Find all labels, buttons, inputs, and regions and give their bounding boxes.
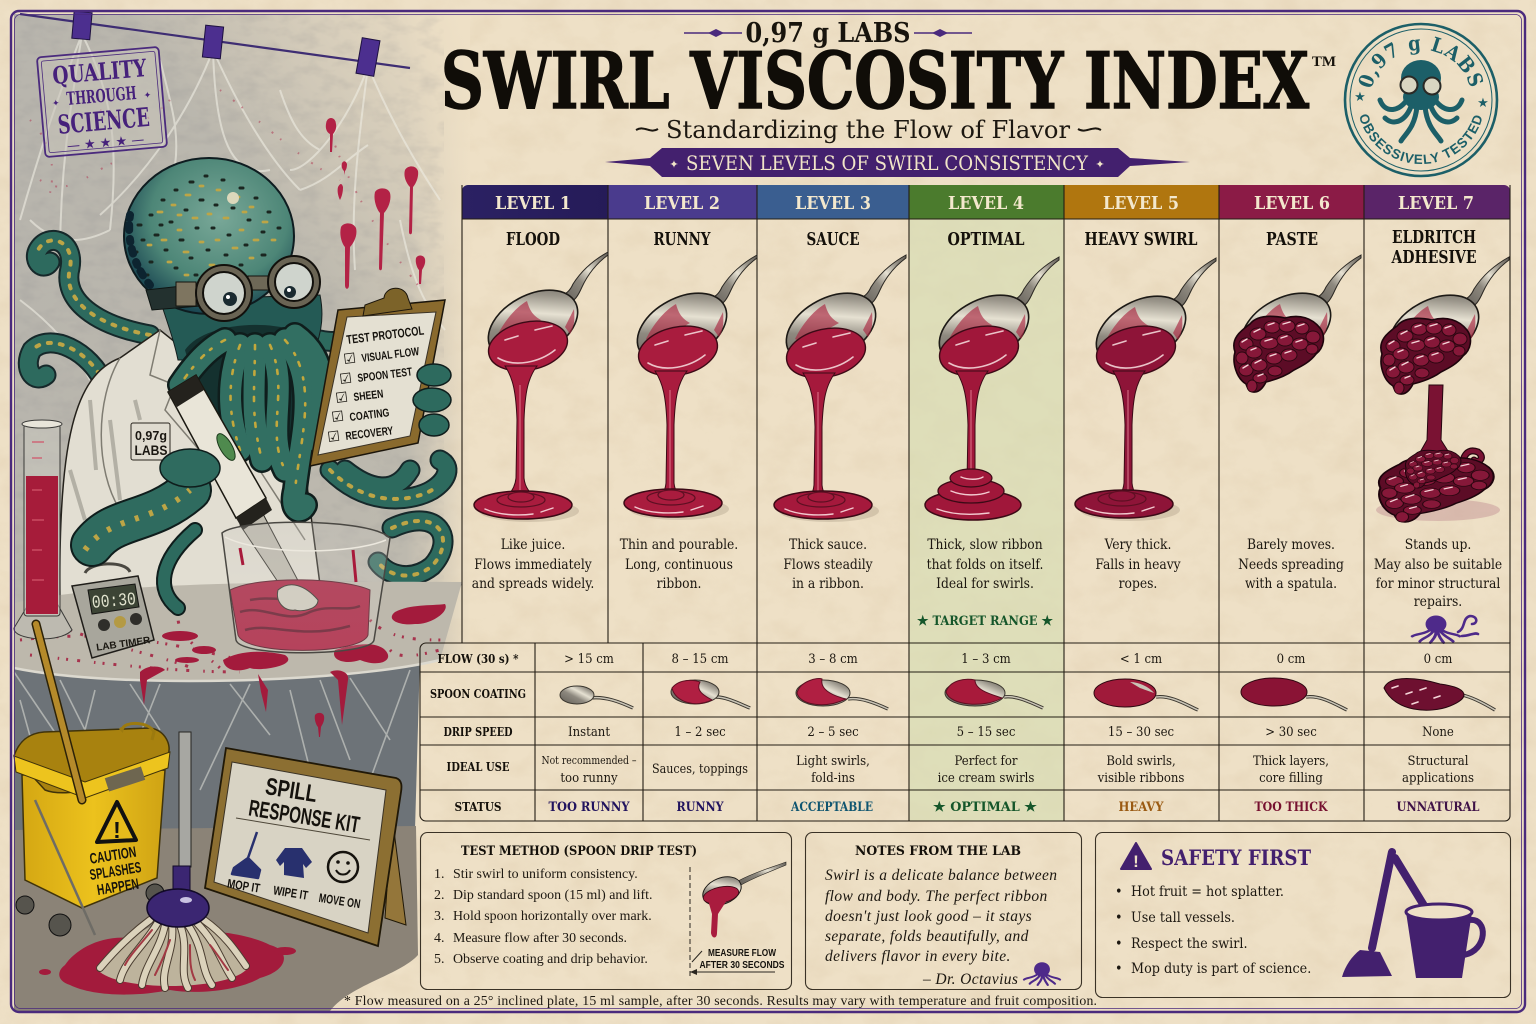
back tentacles [28, 240, 447, 576]
yellow bucket with caution sign: SPLASHES [88, 859, 142, 884]
level 4 column [917, 230, 1059, 629]
plastic sheeting backdrop [14, 14, 470, 654]
level 7 column: for minor structural [1376, 576, 1500, 592]
level 2 column: ribbon. [657, 576, 701, 592]
stamp: 0,97 g labs: 0,97 g LABS [1358, 36, 1484, 87]
panel: safety first: SAFETY FIRST [1161, 845, 1311, 870]
row: status: UNNATURAL [1396, 800, 1480, 815]
clipboard: test protocol: COATING [349, 407, 390, 424]
level header bands: LEVEL 5 [1103, 193, 1179, 214]
row: ideal use: ice cream swirls [938, 771, 1034, 786]
row labels: SPOON COATING [430, 686, 526, 701]
row: ideal use: applications [1402, 771, 1474, 786]
steps list: 2. [434, 888, 444, 903]
sign: quality through science: ✦ [52, 99, 61, 109]
row: status [548, 800, 1480, 815]
safety list [1115, 884, 1311, 977]
level header bands: LEVEL 3 [795, 193, 871, 214]
level header bands: LEVEL 7 [1398, 193, 1474, 214]
row: ideal use: Sauces, toppings [652, 762, 748, 777]
row labels: IDEAL USE [446, 759, 510, 774]
level 7 column: May also be suitable [1374, 557, 1502, 573]
level 6 column: Needs spreading [1238, 557, 1344, 573]
sign: spill response kit: MOP IT [226, 877, 261, 896]
banner: SEVEN LEVELS OF SWIRL CONSISTENCY [686, 152, 1088, 175]
icon: warning triangle: ! [1133, 852, 1139, 871]
level 3 column: Thick sauce. [789, 537, 867, 553]
lab timer: 00:30 [91, 590, 137, 614]
panel: notes from the lab: delivers flavor in every bite. [825, 948, 1011, 965]
row labels: DRIP SPEED [444, 724, 513, 739]
table grid [420, 643, 1510, 821]
table [14, 582, 462, 830]
level 2 column: Long, continuous [625, 557, 733, 573]
row: status: TOO THICK [1254, 800, 1328, 815]
subtitle: Standardizing the Flow of Flavor [666, 116, 1071, 144]
footnote: * Flow measured on a 25° inclined plate, 15 ml sample, after 30 seconds. Results may vary with temperature and fruit composition. [344, 993, 1097, 1008]
row: status: TOO RUNNY [548, 800, 630, 815]
level 6 column: PASTE [1266, 230, 1318, 250]
row: status: ★ OPTIMAL ★ [933, 800, 1037, 815]
beaker with swirl [222, 522, 390, 653]
steps list: 4. [434, 931, 444, 946]
sign: spill response kit [205, 748, 406, 946]
brand line: 0,97 g LABS [746, 18, 910, 49]
panel: notes from the lab: separate, folds beautifully, and [825, 928, 1029, 945]
brand line [684, 18, 972, 49]
sign: quality through science [37, 47, 167, 157]
steps list: Observe coating and drip behavior. [453, 952, 648, 967]
row: drip speed [568, 725, 1454, 740]
row: drip speed: 1 – 2 sec [674, 725, 726, 740]
face tentacles [180, 325, 325, 510]
level 6 column: Barely moves. [1247, 537, 1335, 553]
icon: spoon drip diagram [690, 862, 786, 977]
row: flow [564, 652, 1452, 667]
safety list: • [1115, 936, 1123, 952]
row labels: STATUS [454, 799, 502, 814]
row: drip speed: 15 – 30 sec [1108, 725, 1175, 740]
sign: spill response kit: SPILL [263, 773, 319, 808]
illustration: lab scene [14, 11, 470, 1011]
row: ideal use: too runny [560, 771, 618, 786]
stamp: 0,97 g labs: ★ [1354, 90, 1366, 105]
clothesline and clips [20, 11, 410, 76]
row: flow: 8 – 15 cm [672, 652, 728, 667]
lab coat with badge: 0,97g [135, 428, 167, 443]
icon: warning triangle [1121, 843, 1151, 871]
level 5 column: HEAVY SWIRL [1084, 230, 1198, 250]
level 1 column: Like juice. [501, 537, 565, 553]
stamp: 0,97 g labs [1344, 22, 1498, 178]
row labels: FLOW (30 s) * [438, 651, 519, 666]
clipboard: test protocol: RECOVERY [345, 425, 394, 443]
level 1 column: and spreads widely. [472, 576, 594, 592]
sign: quality through science: QUALITY [51, 53, 148, 90]
stamp: 0,97 g labs: ★ [1477, 96, 1489, 111]
sign: quality through science: ✦ [143, 91, 152, 101]
row: drip speed: None [1422, 725, 1454, 740]
level 3 column: SAUCE [806, 230, 860, 250]
level 4 column: Thick, slow ribbon [927, 537, 1043, 553]
steps list: 5. [434, 952, 444, 967]
column rules [462, 185, 1510, 643]
row: spoon coating [560, 678, 1495, 710]
hand with blender [85, 375, 304, 608]
level header bands: LEVEL 2 [644, 193, 720, 214]
floor spill [39, 931, 296, 995]
row: flow: < 1 cm [1120, 652, 1162, 667]
goggles [146, 256, 320, 321]
level 7 column: Stands up. [1405, 537, 1471, 553]
row: ideal use: core filling [1259, 771, 1323, 786]
clipboard: test protocol: ☑ [339, 371, 353, 388]
icon: spoon drip diagram: AFTER 30 SECONDS [700, 960, 785, 971]
panel: notes from the lab: Swirl is a delicate balance between [825, 867, 1057, 884]
cylinder with red liquid [14, 420, 72, 639]
panel: notes from the lab [806, 832, 1082, 990]
lab coat with badge [60, 330, 322, 600]
panel: test method: TEST METHOD (SPOON DRIP TEST) [461, 844, 697, 859]
steps list: 1. [434, 867, 444, 882]
lab coat with badge: LABS [134, 443, 168, 458]
clipboard: test protocol: SHEEN [353, 388, 384, 404]
row: ideal use: Not recommended – [542, 754, 637, 767]
safety list: • [1115, 884, 1123, 900]
level 4 column: OPTIMAL [948, 230, 1024, 250]
panel: notes from the lab: NOTES FROM THE LAB [855, 843, 1021, 859]
row: ideal use: Bold swirls, [1106, 754, 1176, 769]
yellow bucket with caution sign: ! [113, 817, 121, 843]
row: ideal use: Perfect for [955, 754, 1018, 769]
sign: quality through science: THROUGH [66, 83, 137, 110]
icon: notes octopus [1024, 962, 1060, 985]
row: ideal use [542, 754, 1474, 786]
row: ideal use: Light swirls, [796, 754, 870, 769]
steps list: Stir swirl to uniform consistency. [453, 867, 638, 882]
row labels [430, 651, 526, 814]
sign: quality through science: SCIENCE [57, 103, 151, 141]
clipboard: test protocol [310, 288, 445, 466]
level header bands: LEVEL 4 [948, 193, 1024, 214]
safety list: • [1115, 961, 1123, 977]
level 7 column [1374, 228, 1509, 643]
steps list [434, 867, 652, 967]
safety list: • [1115, 910, 1123, 926]
level 7 column: ELDRITCH [1392, 228, 1476, 248]
mop [100, 732, 246, 988]
row: flow: 0 cm [1277, 652, 1305, 667]
banner [605, 148, 1190, 177]
clipboard: test protocol: ☑ [327, 429, 341, 446]
banner: ✦ [1095, 158, 1105, 171]
level 7 column: repairs. [1414, 594, 1462, 610]
safety list: Mop duty is part of science. [1131, 961, 1311, 977]
clipboard: test protocol: ☑ [331, 409, 345, 426]
clipboard: test protocol: ☑ [343, 351, 357, 368]
level 5 column: Falls in heavy [1095, 557, 1181, 573]
level header bands [462, 185, 1510, 219]
row: drip speed: > 30 sec [1265, 725, 1317, 740]
spills on table [140, 604, 446, 737]
level 1 column: FLOOD [506, 230, 560, 250]
row: ideal use: Structural [1408, 754, 1469, 769]
comparison table [420, 643, 1510, 821]
level 1 column [472, 230, 608, 592]
viscosity table: upper section [462, 185, 1510, 821]
level 4 column: Ideal for swirls. [936, 576, 1034, 592]
clipboard: test protocol: VISUAL FLOW [361, 346, 420, 365]
panel: notes from the lab: doesn't just look good – it stays [825, 908, 1032, 925]
row: flow: > 15 cm [564, 652, 614, 667]
level 7 column: ADHESIVE [1391, 248, 1477, 268]
hand on clipboard [413, 364, 451, 436]
yellow bucket with caution sign [14, 624, 170, 936]
level 3 column: Flows steadily [783, 557, 873, 573]
row: ideal use: fold-ins [811, 771, 855, 786]
level 2 column: Thin and pourable. [620, 537, 738, 553]
level 2 column: RUNNY [654, 230, 711, 250]
panel: notes from the lab: – Dr. Octavius [922, 971, 1018, 988]
level 1 column: Flows immediately [474, 557, 592, 573]
level 2 column [620, 230, 757, 592]
level header bands: LEVEL 1 [495, 193, 571, 214]
panel: safety first [1096, 832, 1510, 998]
icon: mop and bucket [1342, 852, 1483, 978]
safety list: Use tall vessels. [1131, 910, 1235, 926]
level 5 column: Very thick. [1104, 537, 1171, 553]
level header bands: LEVEL 6 [1254, 193, 1330, 214]
row: drip speed: 2 – 5 sec [807, 725, 859, 740]
row: status: RUNNY [676, 800, 724, 815]
sign: spill response kit: RESPONSE KIT [247, 794, 362, 838]
sign: spill response kit: MOVE ON [318, 891, 361, 911]
clipboard: test protocol: ☑ [335, 390, 349, 407]
row: ideal use: visible ribbons [1097, 771, 1184, 786]
level 3 column: in a ribbon. [792, 576, 864, 592]
level 3 column [774, 230, 906, 592]
level 5 column: ropes. [1119, 576, 1157, 592]
clipboard: test protocol: TEST PROTOCOL [346, 324, 425, 347]
sign: quality through science: — ★ ★ ★ — [66, 132, 145, 154]
lab timer [72, 564, 154, 658]
level 4 column: ★ TARGET RANGE ★ [917, 614, 1053, 629]
sign: spill response kit: WIPE IT [272, 883, 309, 903]
row: drip speed: 5 – 15 sec [957, 725, 1016, 740]
row: flow: 3 – 8 cm [808, 652, 858, 667]
level 6 column [1230, 230, 1361, 592]
red drips on sheet [326, 118, 425, 289]
icon: purple octopus [1412, 615, 1478, 643]
safety list: Respect the swirl. [1131, 936, 1248, 952]
level 6 column: with a spatula. [1245, 576, 1337, 592]
row: ideal use: Thick layers, [1253, 754, 1329, 769]
steps list: Hold spoon horizontally over mark. [453, 909, 652, 924]
optimal column highlight [909, 219, 1064, 821]
row: status: HEAVY [1118, 800, 1164, 815]
yellow bucket with caution sign: HAPPEN [96, 876, 140, 899]
safety list: Hot fruit = hot splatter. [1131, 884, 1284, 900]
steps list: 3. [434, 909, 444, 924]
level 5 column [1075, 230, 1216, 592]
row: drip speed: Instant [568, 725, 610, 740]
trademark: TM [1312, 54, 1336, 70]
clipboard: test protocol: SPOON TEST [357, 366, 413, 385]
panel: notes from the lab: flow and body. The perfect ribbon [825, 888, 1048, 905]
steps list: Dip standard spoon (15 ml) and lift. [453, 888, 652, 903]
header titles [441, 18, 1336, 177]
steps list: Measure flow after 30 seconds. [453, 931, 627, 946]
lab timer: LAB TIMER [96, 635, 152, 654]
yellow bucket with caution sign: CAUTION [88, 844, 137, 868]
panel: test method [420, 832, 792, 990]
stamp: 0,97 g labs: OBSESSIVELY TESTED [1360, 114, 1482, 164]
banner: ✦ [669, 158, 679, 171]
floor [14, 826, 418, 1011]
octopus head [124, 158, 322, 360]
icon: spoon drip diagram: MEASURE FLOW [708, 948, 777, 959]
row: status: ACCEPTABLE [790, 800, 873, 815]
row: flow: 1 – 3 cm [961, 652, 1011, 667]
row: flow: 0 cm [1424, 652, 1452, 667]
level 4 column: that folds on itself. [927, 557, 1043, 573]
